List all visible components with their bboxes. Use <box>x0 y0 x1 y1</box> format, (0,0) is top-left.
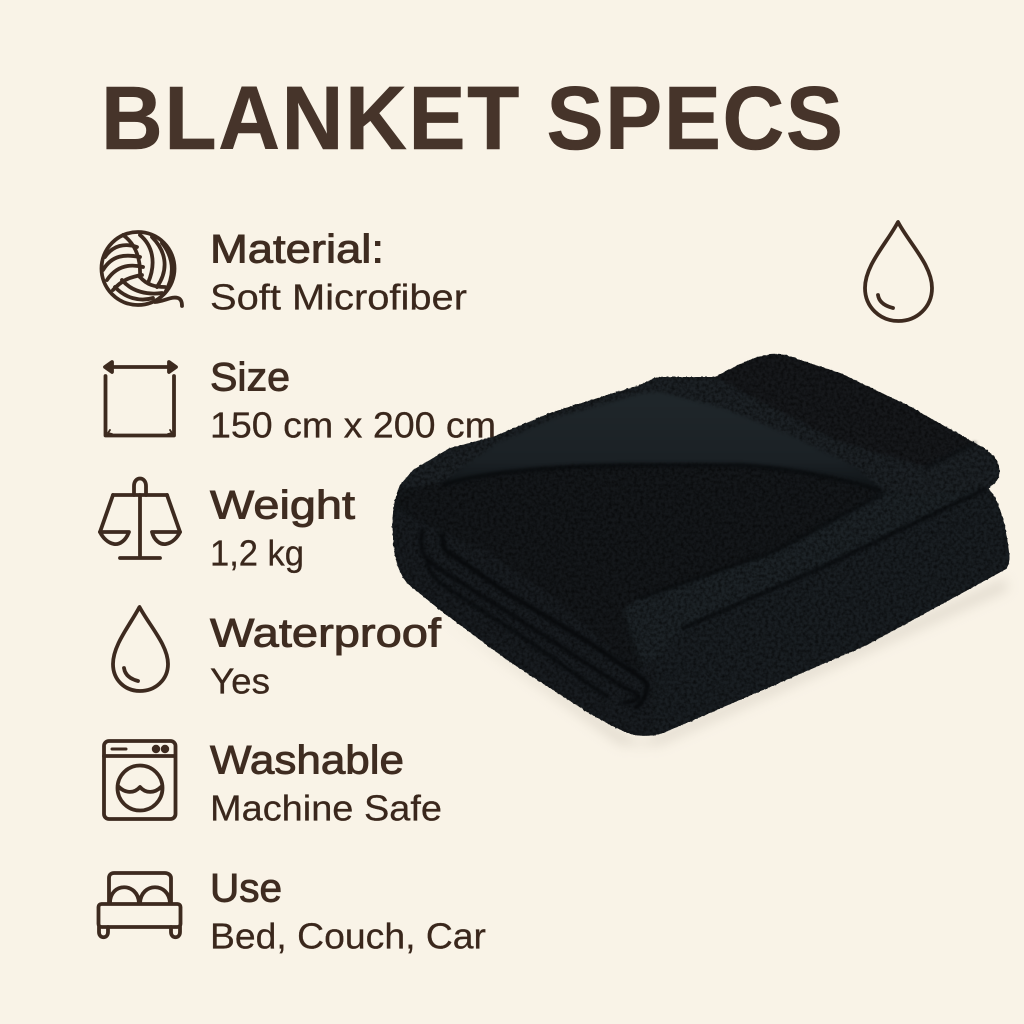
icon: yarn ball <box>102 232 182 306</box>
fold lines <box>421 443 985 707</box>
blanket inner surfaces <box>385 345 1020 745</box>
texture overlay <box>385 345 1020 745</box>
flap border <box>395 377 998 496</box>
label: size: Size <box>210 356 290 400</box>
fleece top panel <box>397 465 883 673</box>
label: washable: Washable <box>210 738 404 782</box>
spec: size <box>105 356 496 446</box>
left roll <box>390 505 657 740</box>
icon: standalone water drop <box>865 222 932 321</box>
label: waterproof: Waterproof <box>210 612 442 656</box>
icon: bed <box>98 873 180 937</box>
spec: washable <box>104 738 442 828</box>
trim band <box>626 492 970 663</box>
blanket silhouette <box>393 354 1009 736</box>
value: weight: 1,2 kg <box>210 532 304 574</box>
blanket shadow <box>440 578 1008 745</box>
value: size: 150 cm x 200 cm <box>210 404 496 446</box>
icon: balance scale <box>100 478 180 558</box>
value: use: Bed, Couch, Car <box>210 916 486 956</box>
label: use: Use <box>210 866 282 910</box>
spec: use <box>98 866 486 956</box>
value: waterproof: Yes <box>210 660 270 702</box>
blanket photo <box>385 345 1020 745</box>
value: washable: Machine Safe <box>210 788 442 828</box>
spec: weight <box>100 478 355 574</box>
rear folded panel <box>715 354 972 442</box>
icon: washing machine <box>104 741 176 819</box>
title: BLANKET SPECS <box>101 68 843 168</box>
spec: waterproof <box>113 607 442 702</box>
icon: dimensions square <box>105 362 176 436</box>
front face <box>650 488 1012 736</box>
smooth flap underside <box>461 392 870 484</box>
label: material: Material: <box>210 228 384 272</box>
value: material: Soft Microfiber <box>210 276 467 318</box>
label: weight: Weight <box>210 484 355 528</box>
icon: water drop <box>113 607 168 691</box>
spec: material <box>102 228 467 318</box>
